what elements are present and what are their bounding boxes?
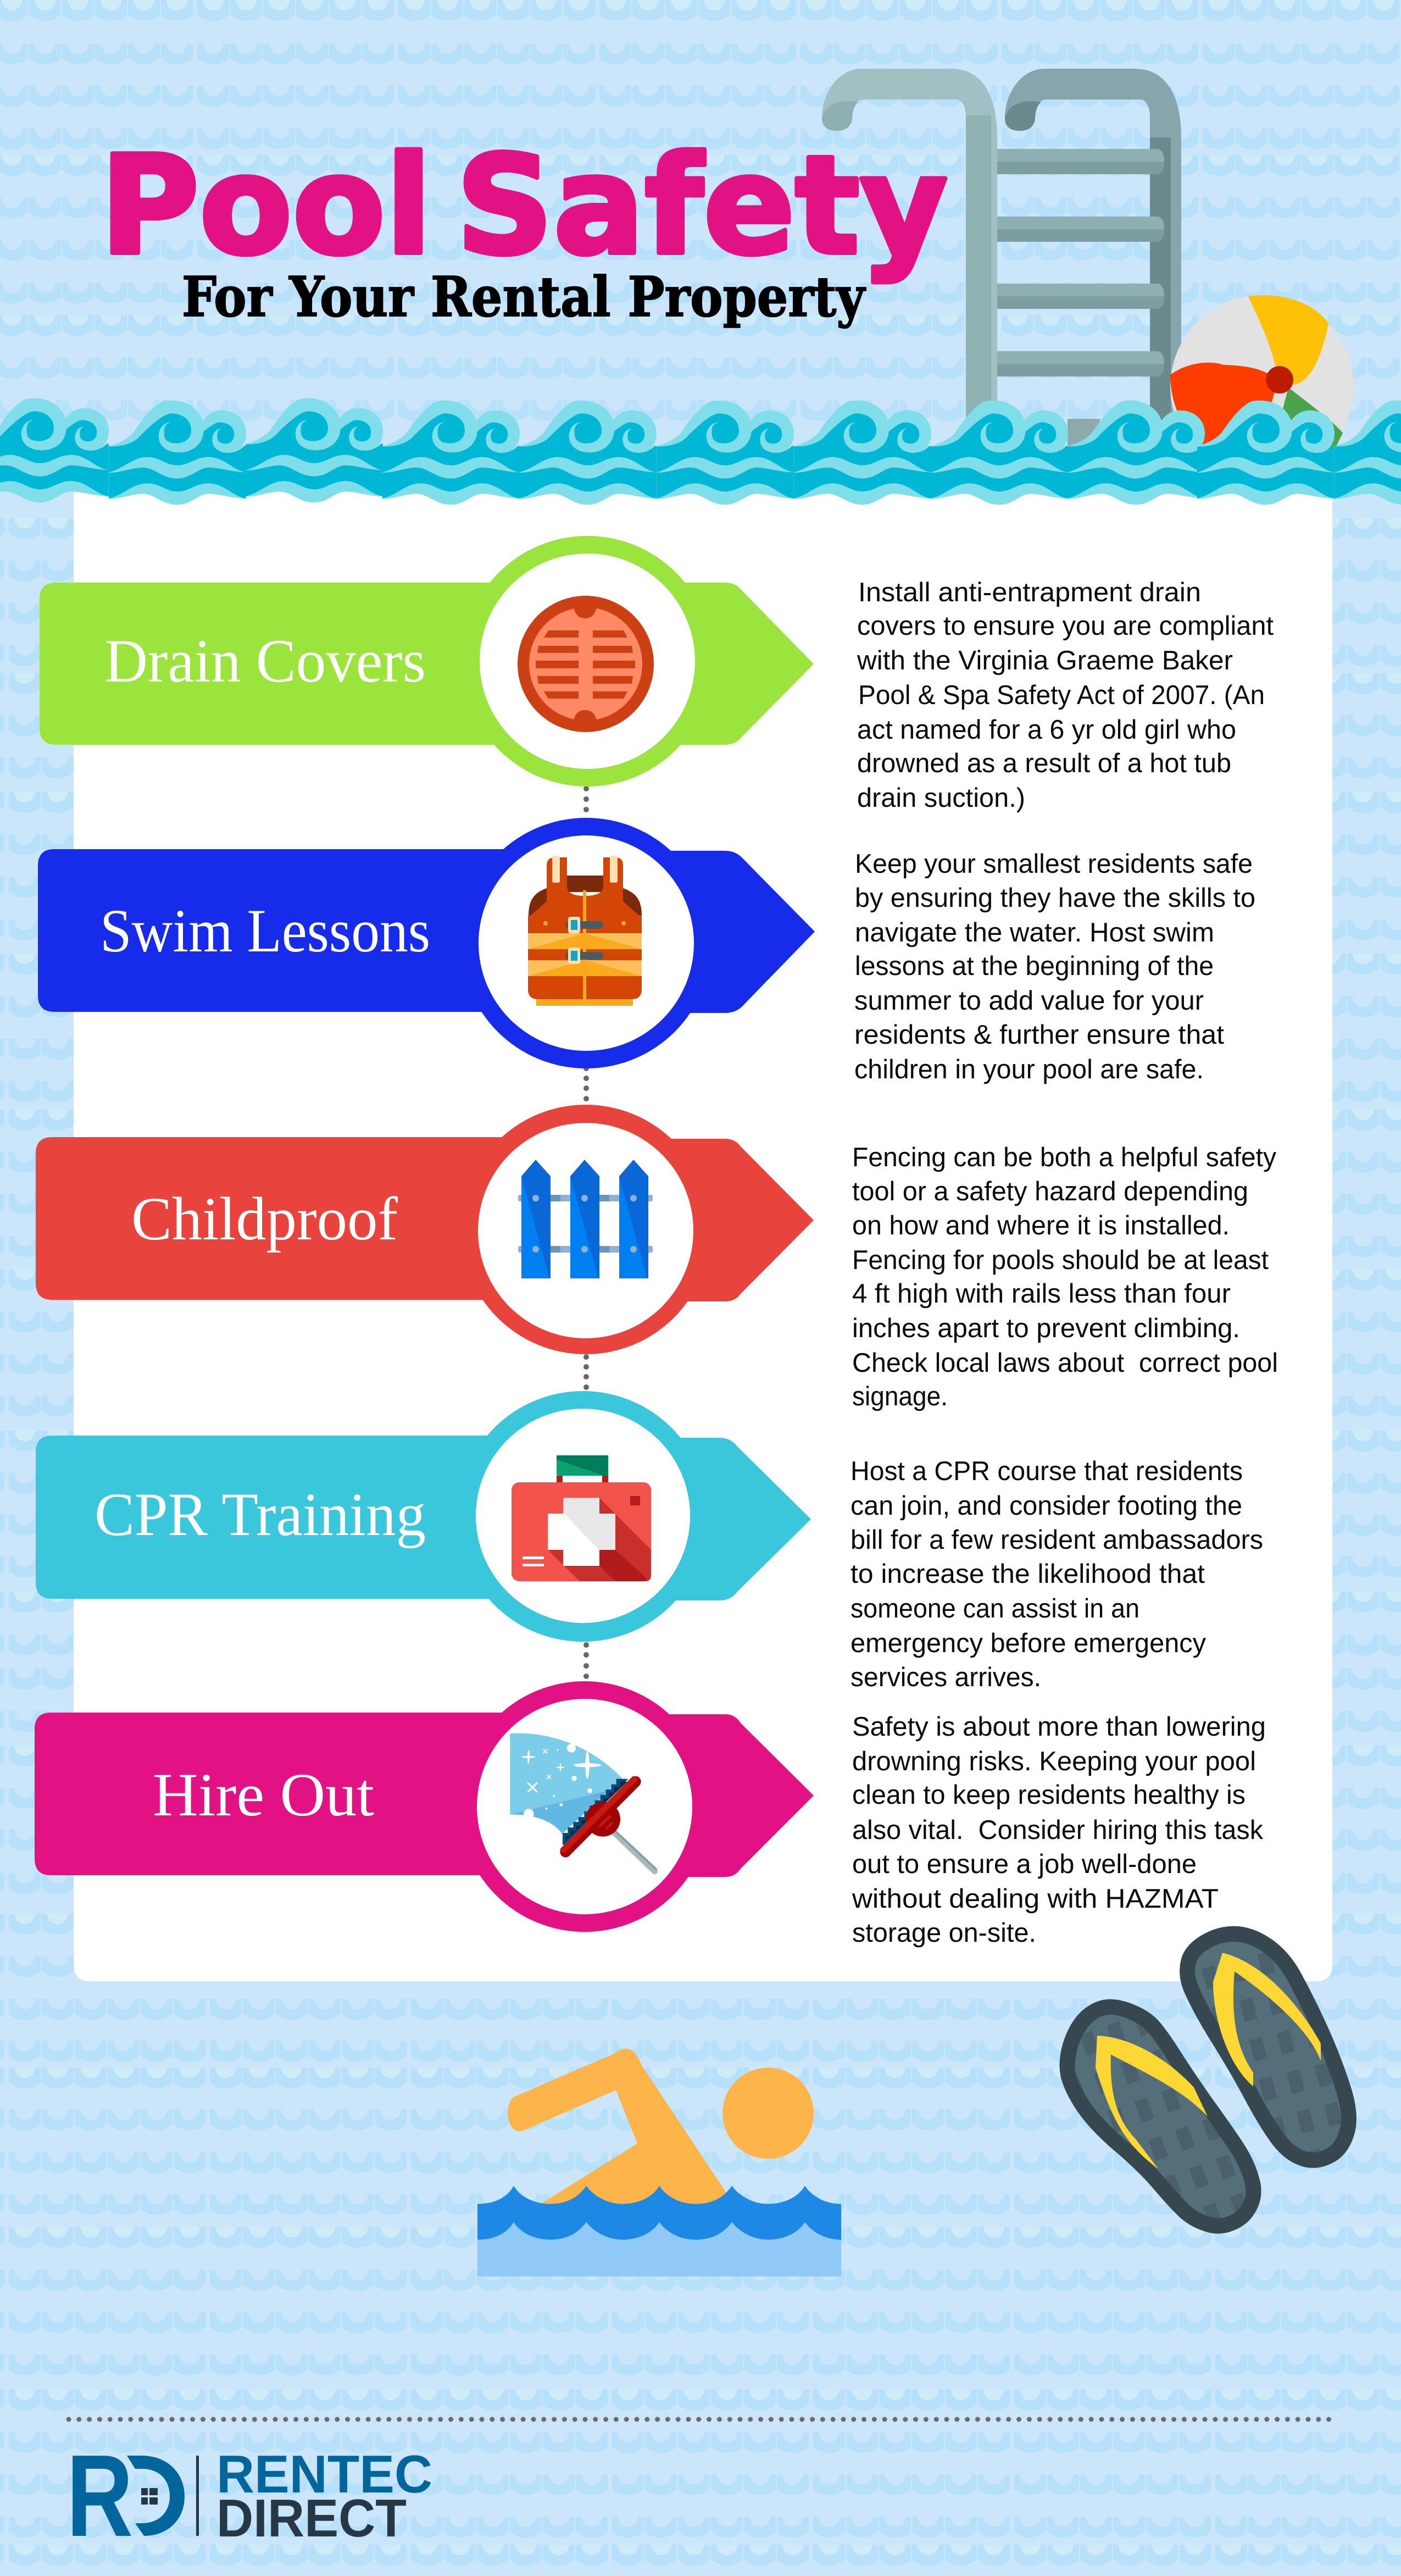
subtitle: For Your Rental Property (182, 264, 866, 329)
icon: pool ladder (822, 69, 1181, 456)
panel: swim lessons text: residents & further ensure that (854, 1020, 1224, 1050)
icon: first aid kit (512, 1455, 651, 1581)
logo: Rentec Direct: R (66, 2430, 133, 2561)
panel: CPR training text: can join, and consider footing the (850, 1491, 1242, 1521)
logo: Rentec Direct: RENTEC (216, 2444, 432, 2504)
panel: childproof text: inches apart to prevent climbing. (852, 1314, 1240, 1343)
panel: swim lessons text: summer to add value for your (854, 986, 1204, 1016)
panel: drain covers text: act named for a 6 yr old girl who (857, 715, 1236, 745)
panel: CPR training text: services arrives. (850, 1663, 1041, 1692)
icon: life vest (528, 856, 642, 1006)
logo: Rentec Direct: DIRECT (216, 2488, 407, 2548)
icon: fence (518, 1160, 653, 1278)
panel: hire out banner (35, 1681, 814, 1932)
icon: drain cover (518, 596, 654, 732)
label: Swim Lessons: Swim Lessons (100, 897, 430, 965)
icon: swimmer (477, 2048, 841, 2276)
icon: beach ball (1170, 295, 1354, 479)
panel: hire out text: also vital. Consider hiring this task (852, 1815, 1263, 1845)
label: Drain Covers: Drain Covers (104, 627, 426, 695)
panel: childproof text: Fencing for pools should be at least (852, 1245, 1269, 1275)
panel: drain covers banner (40, 536, 814, 786)
panel: childproof text: tool or a safety hazard depending (852, 1177, 1248, 1206)
waves band (0, 398, 1401, 505)
panel: CPR training text: someone can assist in an (850, 1594, 1139, 1624)
panel: drain covers text: Pool & Spa Safety Act of 2007. (An (858, 680, 1265, 710)
panel: childproof banner (36, 1105, 814, 1354)
panel: CPR training text: Host a CPR course that residents (850, 1456, 1243, 1486)
panel: swim lessons text (854, 849, 1255, 1084)
icon: flip flops (1060, 1926, 1356, 2234)
panel: swim lessons text: children in your pool are safe. (854, 1055, 1204, 1084)
panel: drain covers text: covers to ensure you are compliant (857, 611, 1274, 641)
panel: drain covers text: with the Virginia Graeme Baker (857, 646, 1233, 675)
panel: CPR training text: to increase the likelihood that (850, 1559, 1205, 1589)
panel: CPR training text (850, 1456, 1263, 1692)
panel: childproof text (852, 1143, 1278, 1411)
panel: CPR training text: bill for a few resident ambassadors (850, 1525, 1263, 1555)
panel: swim lessons text: Keep your smallest residents safe (855, 849, 1253, 879)
panel: CPR training text: emergency before emergency (850, 1628, 1206, 1658)
connector dots (583, 786, 589, 1679)
panel: childproof text: Check local laws about correct pool (852, 1348, 1278, 1378)
icon: pool squeegee (510, 1733, 657, 1871)
panel: hire out text: clean to keep residents healthy is (852, 1780, 1246, 1810)
panel: hire out text: storage on-site. (852, 1918, 1036, 1948)
panel: swim lessons text: navigate the water. Host swim (855, 918, 1214, 948)
panel: drain covers text (857, 578, 1274, 813)
label: CPR Training: CPR Training (94, 1481, 426, 1549)
title (100, 127, 948, 285)
logo: Rentec Direct (66, 2430, 432, 2561)
panel: hire out text: out to ensure a job well-done (852, 1849, 1197, 1879)
label: Hire Out: Hire Out (153, 1761, 374, 1829)
panel: white content card (74, 484, 1332, 1981)
panel: childproof text: signage. (852, 1382, 948, 1411)
panel: swim lessons banner (38, 818, 815, 1068)
panel: childproof text: on how and where it is installed. (852, 1211, 1230, 1240)
panel: childproof text: 4 ft high with rails less than four (852, 1279, 1231, 1309)
footer dotted divider (69, 2417, 1330, 2422)
panel: hire out text: Safety is about more than lowering (852, 1712, 1266, 1742)
title: Safety (456, 127, 948, 285)
panel: drain covers text: drowned as a result of a hot tub (857, 749, 1231, 778)
panel: drain covers text: Install anti-entrapment drain (858, 578, 1201, 607)
title: Pool (100, 127, 432, 285)
panel: swim lessons text: lessons at the beginning of the (855, 951, 1214, 981)
label: Childproof: Childproof (131, 1185, 398, 1253)
panel: drain covers text: drain suction.) (857, 783, 1025, 813)
panel: hire out text: drowning risks. Keeping your pool (852, 1747, 1256, 1776)
panel: childproof text: Fencing can be both a helpful safety (852, 1143, 1276, 1172)
panel: swim lessons text: by ensuring they have the skills to (855, 883, 1255, 913)
panel: hire out text: without dealing with HAZMAT (852, 1884, 1219, 1914)
panel: CPR training banner (36, 1391, 811, 1642)
panel: hire out text (852, 1712, 1266, 1948)
